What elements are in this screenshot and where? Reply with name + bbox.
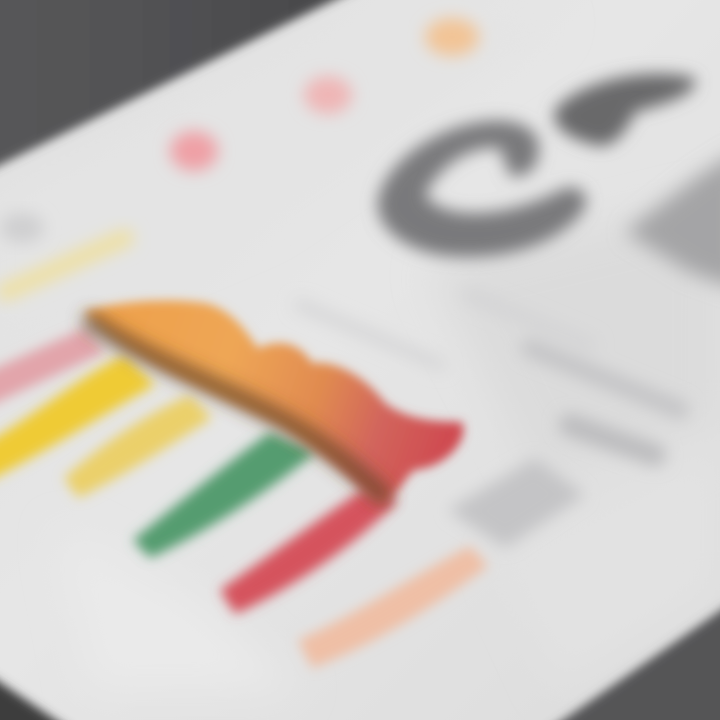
icon: red dot	[170, 131, 218, 171]
desk: bottom-right corner	[520, 590, 720, 720]
bar chart: coloured brush bars	[0, 300, 488, 668]
bar: pink	[0, 328, 105, 410]
gray box, lower right	[448, 458, 585, 548]
shadow under orange bar	[92, 322, 382, 495]
pale gray mark, left	[0, 213, 44, 243]
gray image block, right	[625, 150, 720, 290]
faint yellow stroke, upper left	[5, 238, 125, 292]
icon: orange dot	[425, 18, 479, 56]
icon: dark swoosh segment	[554, 74, 695, 146]
icon: pink dot	[304, 76, 352, 114]
bar: peach	[298, 546, 488, 668]
faint text lines, right	[300, 295, 680, 455]
desk: top-left corner	[0, 0, 395, 180]
bar: red	[220, 488, 398, 614]
donut: ring	[378, 121, 586, 257]
donut chart icon	[378, 74, 695, 257]
top dots	[170, 18, 479, 171]
bar: green	[133, 432, 316, 558]
bar: pale yellow	[64, 395, 212, 498]
bar: large orange-to-red header	[84, 300, 464, 506]
desk: bottom-left corner	[0, 662, 100, 720]
bar: yellow	[0, 355, 155, 485]
